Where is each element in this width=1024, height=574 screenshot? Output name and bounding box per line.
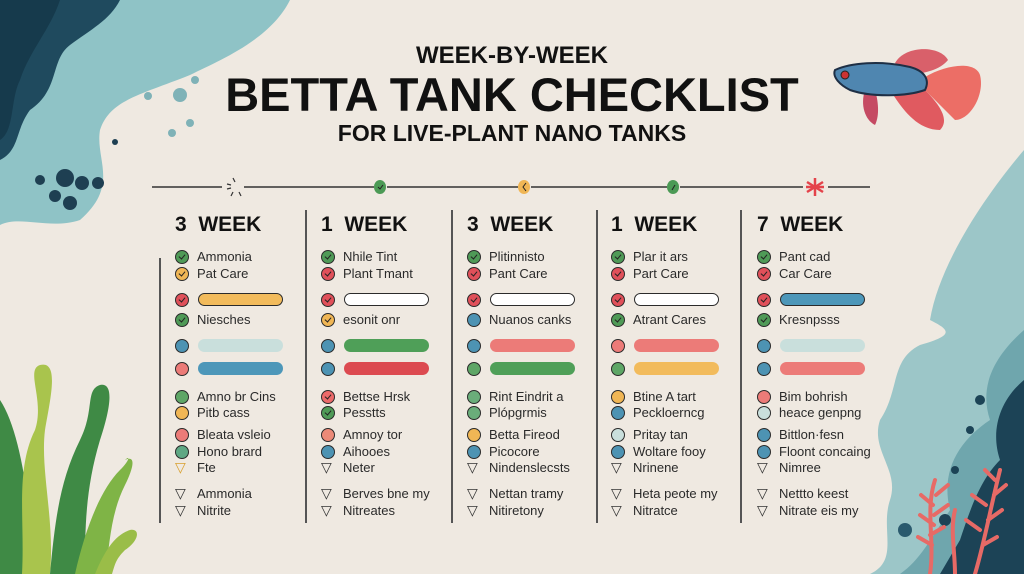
panel: week column 4: ▽ <box>611 485 622 501</box>
panel: week column 4: Woltare fooy <box>633 444 706 459</box>
marker: green check <box>374 180 386 194</box>
panel: week column 1: Bleata vsleio <box>197 427 271 442</box>
panel: week column 2: Pesstts <box>343 405 386 420</box>
panel: week column 1: Pitb cass <box>197 405 250 420</box>
heading: 1 WEEK <box>321 213 407 236</box>
panel: week column 2: ▽ <box>321 485 332 501</box>
panel: week column 4: Nrinene <box>633 460 679 475</box>
panel: week column 2: esonit onr <box>343 312 400 327</box>
panel: week column 5: Bim bohrish <box>779 389 848 404</box>
panel: week column 3: Plitinnisto <box>489 249 545 264</box>
panel: week column 2 <box>321 213 430 518</box>
panel: week column 5: Nitrate eis my <box>779 503 858 518</box>
panel: week column 3: Nindenslecsts <box>489 460 570 475</box>
panel: week column 3: Nitiretony <box>489 503 544 518</box>
panel: week column 4: ▽ <box>611 502 622 518</box>
panel: week column 2: Amnoy tor <box>343 427 402 442</box>
panel: week column 4: Nitratce <box>633 503 678 518</box>
panel: week column 4: Atrant Cares <box>633 312 706 327</box>
panel: week column 1: ▽ <box>175 485 186 501</box>
panel: week column 1: Hono brard <box>197 444 262 459</box>
panel: week column 5: ▽ <box>757 502 768 518</box>
panel: week column 2: Berves bne my <box>343 486 430 501</box>
panel: week column 3: Nettan tramy <box>489 486 563 501</box>
panel: week column 4: Heta peote my <box>633 486 718 501</box>
panel: week column 4: Btine A tart <box>633 389 696 404</box>
panel: week column 3: ▽ <box>467 459 478 475</box>
panel: week column 4 <box>611 213 719 518</box>
panel: week column 5: Pant cad <box>779 249 830 264</box>
marker: green <box>667 180 679 194</box>
panel: week column 5: Nimree <box>779 460 821 475</box>
title: main: BETTA TANK CHECKLIST <box>225 68 799 121</box>
panel: week column 1: Nitrite <box>197 503 231 518</box>
panel: week column 2: ▽ <box>321 502 332 518</box>
panel: week column 3: Picocore <box>489 444 540 459</box>
panel: week column 1: Fte <box>197 460 216 475</box>
panel: week column 4: Part Care <box>633 266 689 281</box>
panel: week column 3 <box>467 213 575 518</box>
panel: week column 4: Plar it ars <box>633 249 688 264</box>
panel: week column 5: Kresnpsss <box>779 312 840 327</box>
panel: week column 5: Nettto keest <box>779 486 848 501</box>
marker: red star <box>806 178 824 196</box>
title: week-by-week: WEEK-BY-WEEK <box>416 42 608 69</box>
panel: week column 1: Ammonia <box>197 249 252 264</box>
panel: week column 3: Nuanos canks <box>489 312 571 327</box>
panel: week column 3: Pant Care <box>489 266 548 281</box>
panel: week column 2: Neter <box>343 460 375 475</box>
panel: week column 1: ▽ <box>175 459 186 475</box>
panel: week column 3: Rint Eindrit a <box>489 389 563 404</box>
heading: 3 WEEK <box>175 213 261 236</box>
panel: week column 2: ▽ <box>321 459 332 475</box>
panel: week column 1: ▽ <box>175 502 186 518</box>
panel: week column 4: Pritay tan <box>633 427 688 442</box>
panel: week column 1 <box>175 213 283 518</box>
panel: week column 2: Nitreates <box>343 503 395 518</box>
timeline <box>152 178 870 196</box>
panel: week column 3: ▽ <box>467 485 478 501</box>
panel: week column 2: Bettse Hrsk <box>343 389 410 404</box>
heading: 3 WEEK <box>467 213 553 236</box>
subtitle: FOR LIVE-PLANT NANO TANKS <box>338 120 686 146</box>
panel: week column 3: ▽ <box>467 502 478 518</box>
marker: orange <box>518 180 530 194</box>
panel: week column 5: ▽ <box>757 485 768 501</box>
panel: week column 1: Ammonia <box>197 486 252 501</box>
panel: week column 2: Nhile Tint <box>343 249 397 264</box>
panel: week column 1: Niesches <box>197 312 250 327</box>
icon: betta fish <box>833 49 981 130</box>
panel: week column 5 <box>757 213 871 518</box>
panel: week column 5: ▽ <box>757 459 768 475</box>
heading: 7 WEEK <box>757 213 843 236</box>
panel: week column 5: Car Care <box>779 266 832 281</box>
panel: week column 1: Amno br Cins <box>197 389 276 404</box>
panel: week column 5: heace genpng <box>779 405 861 420</box>
panel: week column 4: ▽ <box>611 459 622 475</box>
marker: sparkle <box>227 178 241 196</box>
panel: week column 4: Peckloerncg <box>633 405 705 420</box>
panel: week column 2: Aihooes <box>343 444 390 459</box>
panel: week column 1: Pat Care <box>197 266 248 281</box>
panel: week column 5: Floont concaing <box>779 444 871 459</box>
panel: week column 3: Plópgrmis <box>489 405 547 420</box>
panel: week column 2: Plant Tmant <box>343 266 413 281</box>
panel: week column 3: Betta Fireod <box>489 427 560 442</box>
panel: week column 5: Bittlon·fesn <box>779 427 844 442</box>
heading: 1 WEEK <box>611 213 697 236</box>
